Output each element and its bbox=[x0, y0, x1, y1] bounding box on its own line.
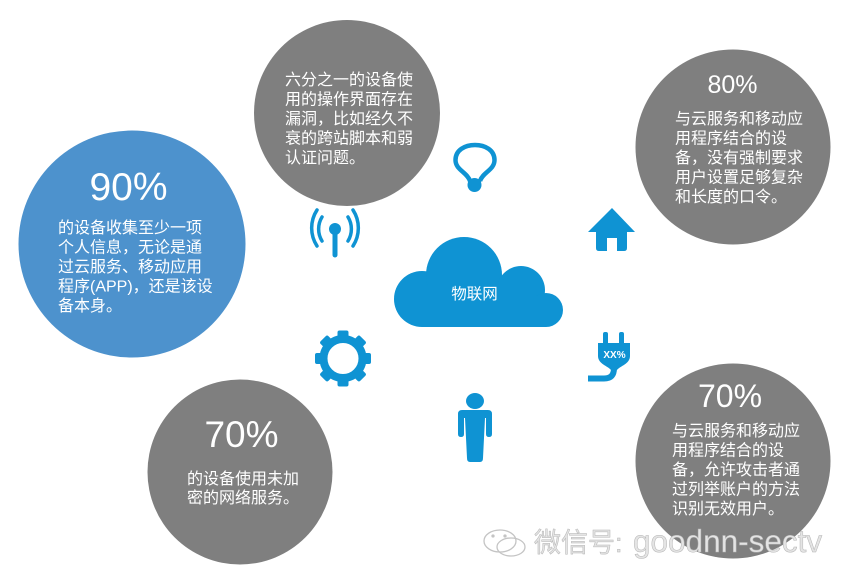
text: 80% description: 用程序结合的设 bbox=[675, 130, 787, 148]
text: 70% right description: 识别无效用户。 bbox=[672, 500, 784, 518]
text: one sixth description: 六分之一的设备使 bbox=[285, 71, 413, 89]
icon: house bbox=[588, 208, 635, 251]
icon: cloud bbox=[394, 237, 563, 327]
watermark bbox=[484, 523, 822, 559]
text: 90% description: 程序(APP)，还是该设 bbox=[58, 278, 213, 296]
icon: person bbox=[458, 393, 492, 462]
text: 70% left description: 的设备使用未加 bbox=[187, 470, 299, 488]
text: 70% left description: 密的网络服务。 bbox=[187, 488, 299, 507]
stat: 80%: 80% bbox=[707, 71, 758, 99]
text: 90% description: 的设备收集至少一项 bbox=[58, 219, 202, 237]
stat: 70% left: 70% bbox=[204, 414, 279, 455]
stat: 70% right: 70% bbox=[698, 378, 762, 414]
icon: plug bbox=[588, 332, 630, 378]
label: plug percent: XX% bbox=[603, 350, 626, 361]
text: 80% description: 与云服务和移动应 bbox=[675, 109, 803, 128]
icon: gear bbox=[315, 330, 371, 386]
panel: 70% grey circle left bbox=[148, 380, 332, 564]
text: one sixth description: 用的操作界面存在 bbox=[285, 90, 413, 108]
text: 70% right description: 用程序结合的设 bbox=[672, 442, 784, 460]
text: 90% description: 过云服务、移动应用 bbox=[58, 257, 202, 276]
text: one sixth description: 衰的跨站脚本和弱 bbox=[285, 130, 413, 148]
text: 70% right description: 过列举账户的方法 bbox=[672, 480, 800, 498]
text: 90% description: 备本身。 bbox=[58, 297, 122, 315]
text: one sixth description: 漏洞，比如经久不 bbox=[285, 110, 413, 128]
panel: 80% grey circle bbox=[636, 50, 830, 244]
icon: light bulb bbox=[456, 145, 494, 192]
label: cloud: 物联网 bbox=[451, 285, 498, 303]
panel: 70% grey circle right bbox=[636, 364, 830, 558]
text: 80% description: 备，没有强制要求 bbox=[675, 149, 803, 167]
text: 80% description: 和长度的口令。 bbox=[675, 188, 787, 206]
text: 90% description: 个人信息，无论是通 bbox=[58, 238, 202, 256]
icon: wechat logo bbox=[484, 530, 525, 556]
text: 80% description: 用户设置足够复杂 bbox=[675, 168, 803, 186]
text: wechat account: 微信号: bbox=[534, 528, 623, 558]
text: one sixth description: 认证问题。 bbox=[285, 149, 365, 167]
stat: 90%: 90% bbox=[89, 166, 168, 209]
text: 70% right description: 与云服务和移动应 bbox=[672, 421, 800, 440]
text: 70% right description: 备，允许攻击者通 bbox=[672, 461, 800, 479]
panel: 90% blue circle bbox=[18, 130, 246, 358]
icon: wireless antenna bbox=[312, 210, 358, 255]
panel: top grey circle bbox=[254, 20, 440, 206]
text: wechat account: goodnn-sectv bbox=[633, 523, 822, 559]
